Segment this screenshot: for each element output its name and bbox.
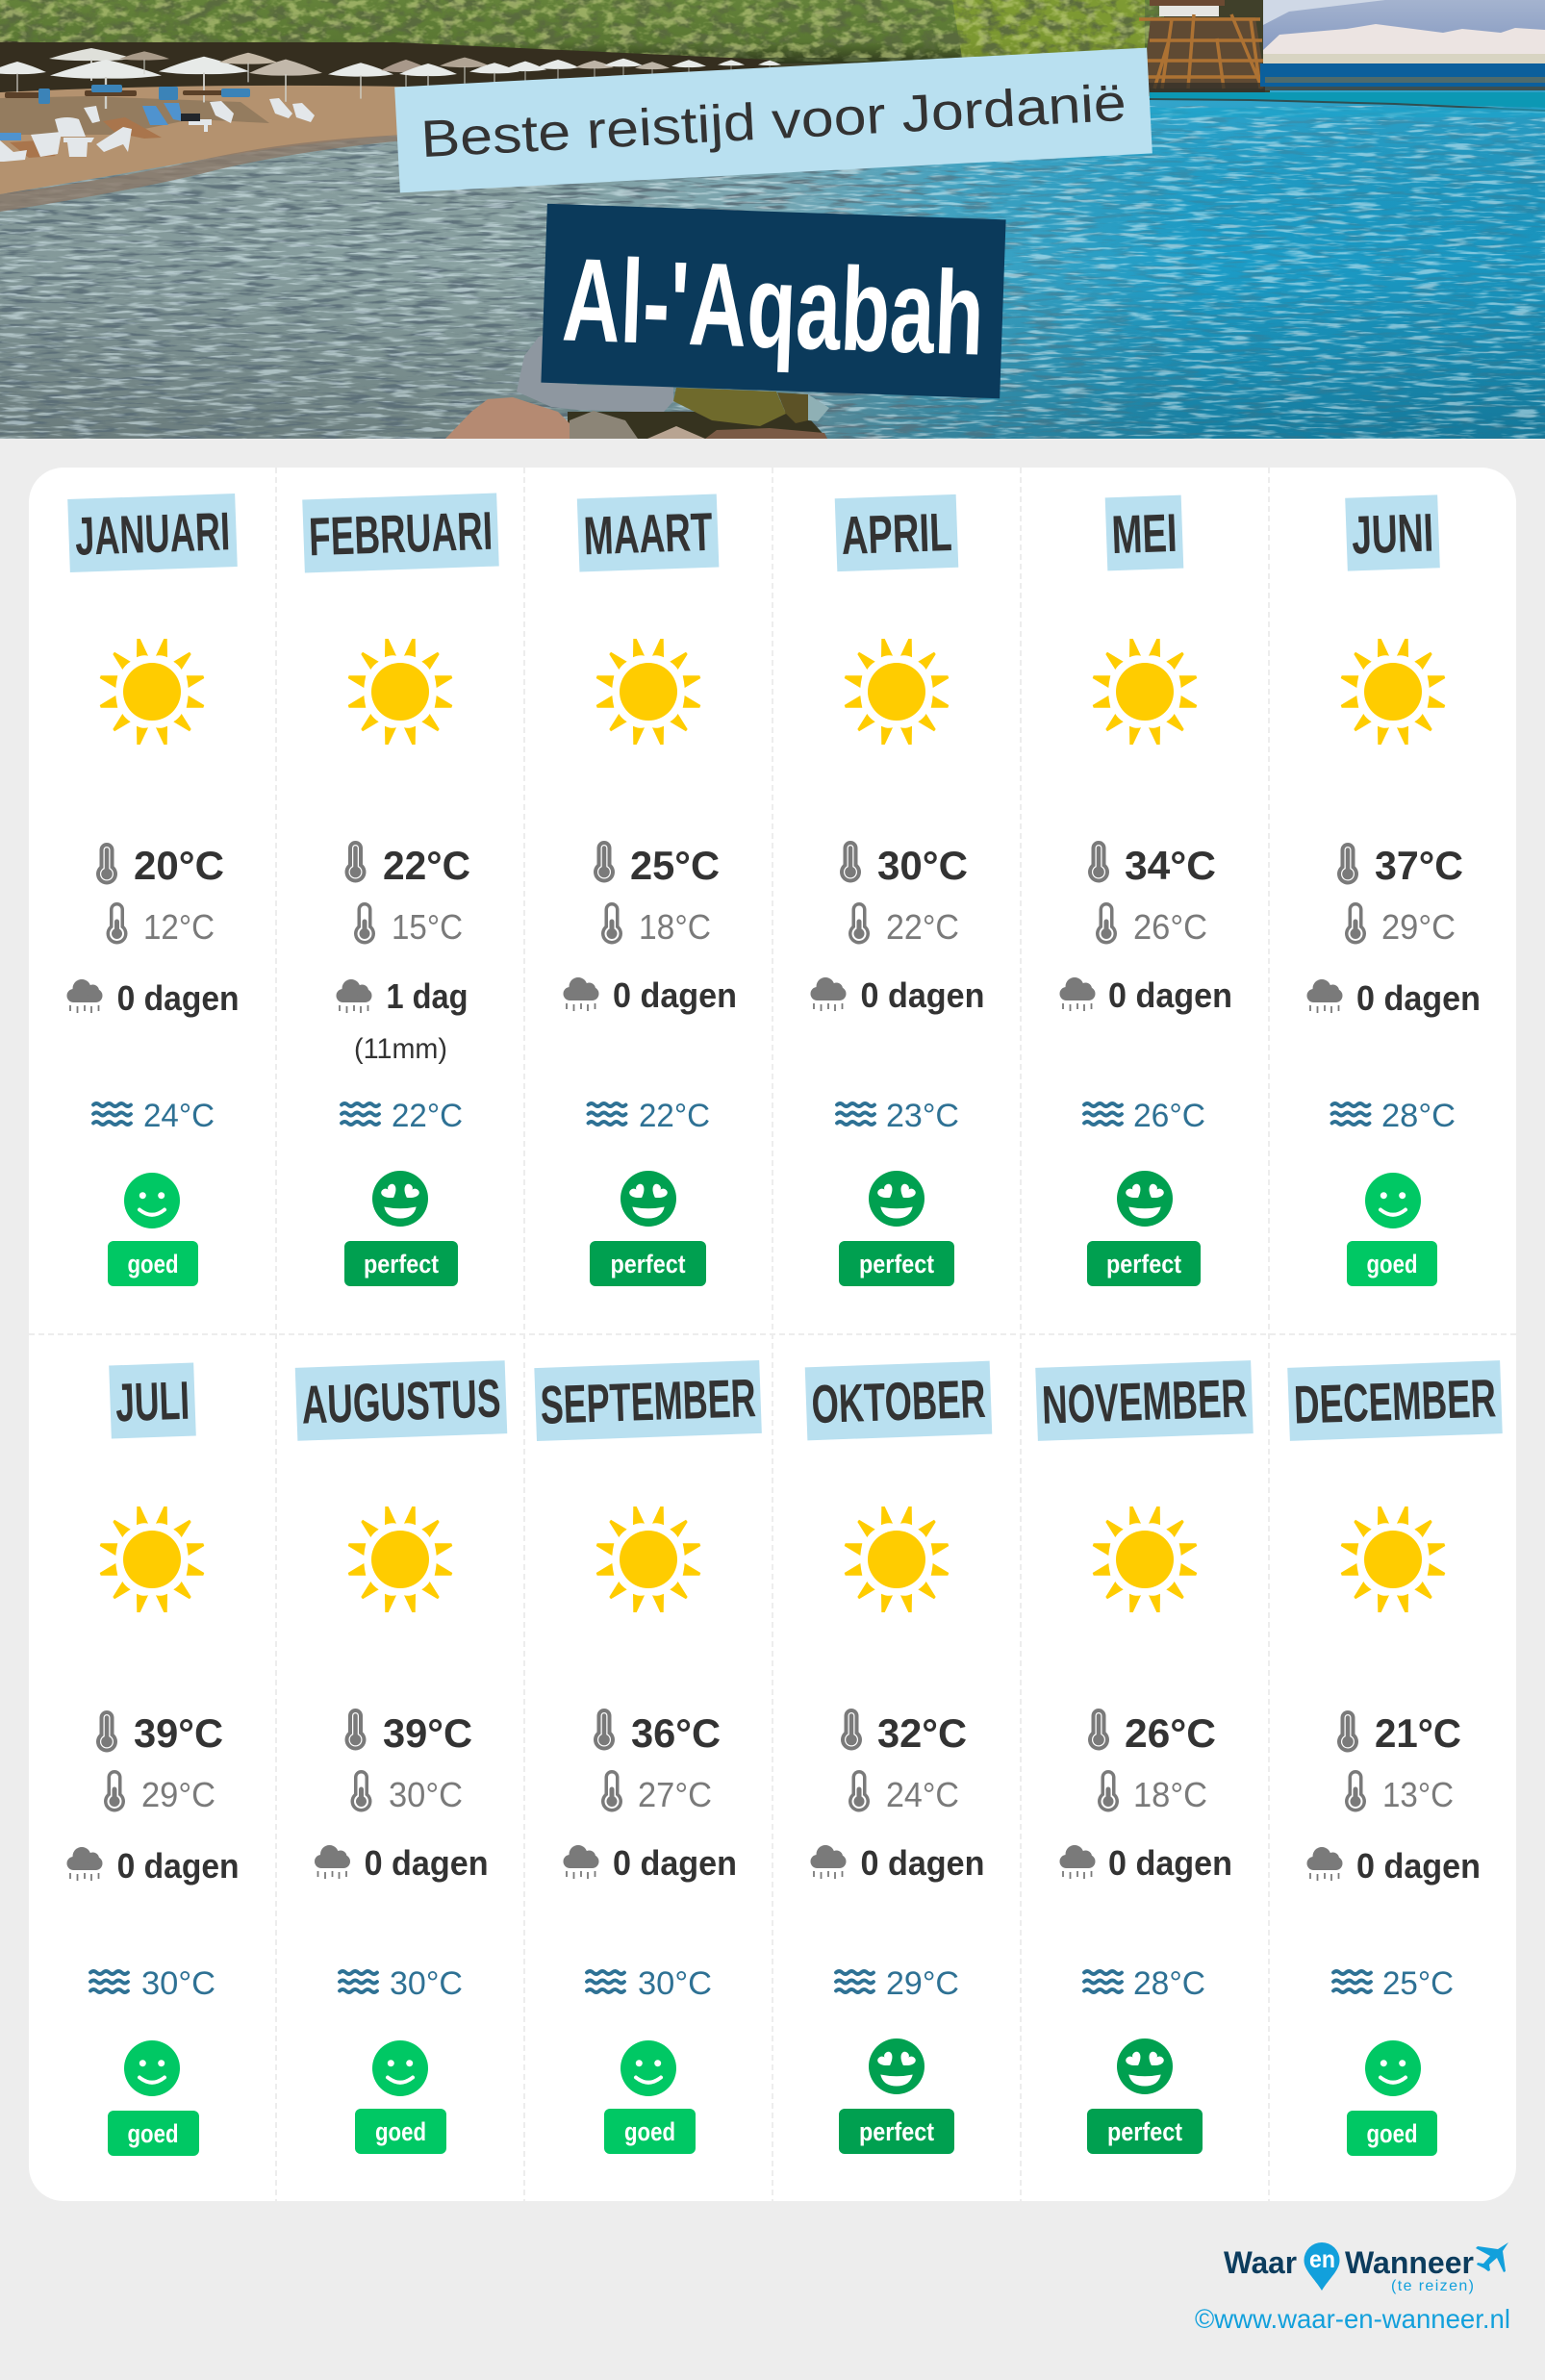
icon: map pin [1304,2242,1339,2291]
min temperature [1345,907,1456,947]
month label [109,1362,196,1439]
rain days: 0 dagen [117,978,240,1018]
month label: JANUARI [74,500,231,567]
rating badge: goed [127,2119,179,2148]
rain amount: (11mm) [354,1033,447,1065]
month label [805,1361,992,1440]
min temperature: 22°C [886,907,959,947]
rating badge [1087,2109,1203,2154]
month: oktober [805,1361,992,2154]
sea temperature: 26°C [1133,1098,1205,1134]
rating face [372,2040,428,2096]
rating face [869,2038,924,2094]
header photo: Aqaba beach and sea [0,0,1545,439]
website credit: ©www.waar-en-wanneer.nl [1195,2304,1510,2334]
min temperature [104,1775,215,1814]
rating badge [1087,1241,1201,1286]
month: december [1287,1360,1503,2156]
month label: NOVEMBER [1041,1367,1248,1435]
month label: APRIL [840,501,953,566]
sun icon [100,639,204,745]
max temperature [344,843,470,888]
destination banner: Al-'Aqabah [561,234,986,381]
sun icon [1341,639,1445,745]
sea temperature [1084,1098,1205,1134]
month: juli [67,1362,240,2156]
rain days: 0 dagen [613,975,737,1015]
rain days [564,1843,737,1883]
min temperature [1345,1775,1454,1814]
sun icon [1093,639,1197,745]
rain days [315,1843,489,1883]
rain days [337,976,468,1016]
rain days: 0 dagen [860,975,985,1015]
min temperature [601,1775,712,1814]
month: november [1035,1360,1254,2154]
month: augustus [295,1360,507,2154]
sea temperature: 30°C [390,1965,463,2002]
rating badge: goed [1366,1250,1418,1279]
sun icon [348,639,452,745]
min temperature: 12°C [143,907,215,947]
min temperature [354,907,463,947]
month label [835,494,958,571]
min temperature [106,907,215,947]
sun icon [845,639,949,745]
max temperature [1337,1710,1461,1756]
rain days: 0 dagen [365,1843,489,1883]
climate calendar panel [29,468,1516,2201]
min temperature [1098,1775,1207,1814]
rating badge: perfect [1107,2117,1182,2146]
title banner: Beste reistijd voor Jordanië [419,74,1127,168]
sun icon [1093,1506,1197,1612]
max temperature: 30°C [877,843,968,888]
wooden tower [1139,0,1266,92]
month label [1345,494,1440,571]
max temperature: 26°C [1125,1710,1216,1756]
min temperature: 13°C [1382,1775,1454,1814]
sea temperature: 28°C [1133,1965,1205,2002]
rain days [1060,975,1232,1015]
max temperature: 39°C [134,1710,223,1756]
icon: airplane [1476,2242,1508,2272]
distant sky, mountains and sea [1150,0,1545,117]
sea temperature: 22°C [639,1098,710,1134]
month label [534,1360,762,1441]
min temperature: 15°C [392,907,463,947]
rain days: 1 dag [387,976,468,1016]
month label: SEPTEMBER [540,1367,757,1435]
min temperature [848,1775,959,1814]
rain days: 0 dagen [1356,978,1481,1018]
rain days [564,975,737,1015]
max temperature: 34°C [1125,843,1216,888]
max temperature: 22°C [383,843,470,888]
sea temperature [342,1098,463,1134]
rating badge: goed [375,2117,426,2146]
sun icon [1341,1506,1445,1612]
rain days: 0 dagen [117,1846,240,1886]
sea temperature [90,1965,215,2002]
rating badge: perfect [364,1250,439,1279]
logo: Waar en Wanneer: en [1309,2246,1335,2273]
rating badge: perfect [859,2117,934,2146]
rating badge [344,1241,458,1286]
sea temperature: 24°C [143,1098,215,1134]
rating badge: goed [127,1250,179,1279]
rain days: 0 dagen [613,1843,737,1883]
sea temperature: 30°C [141,1965,215,2002]
month label [1035,1360,1254,1441]
rating face [372,1171,428,1227]
rating face [1117,1171,1173,1227]
max temperature: 37°C [1375,843,1463,888]
rain days [1306,978,1481,1018]
rain days [1306,1846,1481,1886]
beach tables and chairs [0,85,315,162]
rating face [1117,2038,1173,2094]
rain days: 0 dagen [1108,1843,1232,1883]
min temperature [848,907,959,947]
max temperature: 36°C [631,1710,721,1756]
min temperature: 29°C [1381,907,1456,947]
sea temperature: 28°C [1381,1098,1456,1134]
sea temperature [836,1965,959,2002]
sea temperature: 25°C [1382,1965,1454,2002]
sea temperature: 22°C [392,1098,463,1134]
sun icon [100,1506,204,1612]
month label: JUNI [1351,502,1434,565]
sun icon [596,1506,700,1612]
min temperature [1096,907,1207,947]
logo: Waar en Wanneer: Wanneer [1345,2245,1474,2280]
sun icon [845,1506,949,1612]
sea temperature [1333,1965,1454,2002]
min temperature [350,1775,463,1814]
min temperature: 18°C [639,907,711,947]
sea temperature: 30°C [638,1965,712,2002]
min temperature: 30°C [389,1775,463,1814]
rating face [124,2040,180,2096]
rating badge [590,1241,706,1286]
max temperature: 32°C [877,1710,967,1756]
sea temperature [340,1965,463,2002]
sea temperature [589,1098,710,1134]
rain days [67,978,240,1018]
month label: MAART [583,501,714,566]
month label [67,494,238,572]
month label [577,494,719,572]
month label: JULI [114,1370,190,1432]
rating badge [839,1241,954,1286]
month: maart [564,494,737,1286]
rain days: 0 dagen [1356,1846,1481,1886]
rating badge: goed [1366,2119,1418,2148]
max temperature [344,1710,472,1756]
max temperature: 39°C [383,1710,472,1756]
rain days: 0 dagen [1108,975,1232,1015]
rating face [1365,1173,1421,1228]
rating badge: perfect [610,1250,686,1279]
rating badge: goed [624,2117,675,2146]
rain days: 0 dagen [860,1843,985,1883]
month: februari [302,493,499,1286]
sea temperature [1331,1098,1456,1134]
max temperature [1337,843,1463,888]
logo: Waar en Wanneer [1224,2242,1508,2294]
rating face [1365,2040,1421,2096]
month: januari [67,494,240,1286]
min temperature: 18°C [1133,1775,1207,1814]
rating badge: perfect [859,1250,934,1279]
rating face [124,1173,180,1228]
month label [302,493,499,573]
rain days [810,1843,985,1883]
rain days [810,975,985,1015]
rain days [1060,1843,1232,1883]
month label: MEI [1110,502,1178,565]
month label: AUGUSTUS [300,1367,502,1435]
rating badge [604,2109,696,2154]
month label: OKTOBER [810,1368,987,1434]
logo: Waar en Wanneer: Waar [1224,2245,1297,2280]
sun icon [596,639,700,745]
min temperature: 26°C [1133,907,1207,947]
sea temperature: 29°C [886,1965,959,2002]
rating badge [1347,2111,1437,2156]
max temperature: 21°C [1375,1710,1461,1756]
sea temperature [587,1965,712,2002]
min temperature: 24°C [886,1775,959,1814]
month label [295,1360,507,1441]
rain days [67,1846,240,1886]
logo: Waar en Wanneer: (te reizen) [1391,2278,1474,2294]
min temperature [601,907,711,947]
rating badge: perfect [1106,1250,1181,1279]
sea temperature [1084,1965,1205,2002]
rating face [621,2040,676,2096]
month label [1105,495,1183,570]
sea temperature [837,1098,959,1134]
beach umbrellas [0,48,781,109]
month label: FEBRUARI [308,500,494,567]
rating badge [108,1241,198,1286]
month: mei [1060,495,1232,1286]
max temperature: 25°C [630,843,720,888]
sea temperature: 23°C [886,1098,959,1134]
title banner [394,48,1152,192]
min temperature: 27°C [638,1775,712,1814]
min temperature: 29°C [141,1775,215,1814]
max temperature: 20°C [134,843,224,888]
rating badge [839,2109,954,2154]
month: april [810,494,985,1286]
rating face [621,1171,676,1227]
sea temperature [93,1098,215,1134]
destination banner [541,204,1006,398]
rating face [869,1171,924,1227]
month: juni [1306,494,1481,1286]
rating badge [355,2109,446,2154]
rating badge [1347,1241,1437,1286]
rating badge [108,2111,199,2156]
shoreline rocks [445,332,829,439]
sun icon [348,1506,452,1612]
month: september [534,1360,762,2154]
